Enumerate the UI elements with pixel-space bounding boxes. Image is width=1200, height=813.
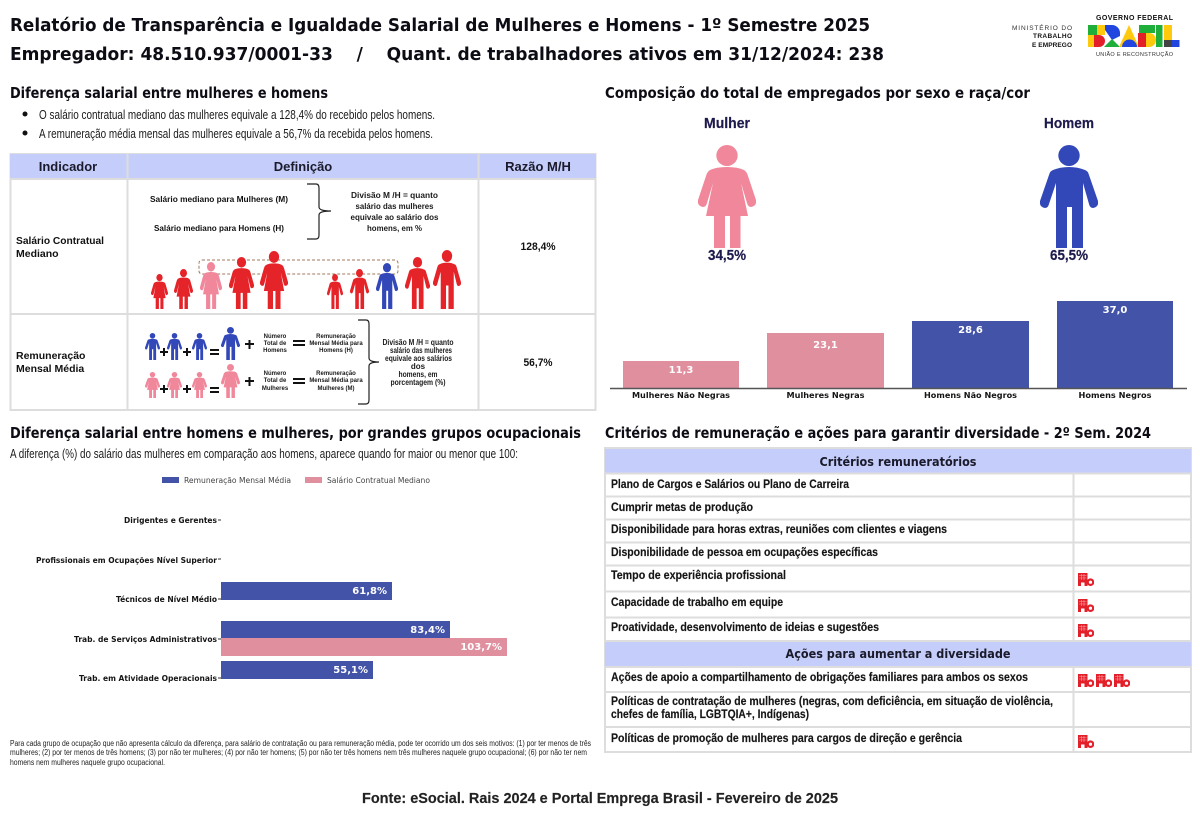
row: remuneração mensal média: Total de — [264, 378, 287, 384]
logo: governo federal brasil: GOVERNO FEDERAL — [1096, 15, 1174, 22]
header: critérios remuneratórios — [605, 449, 1191, 473]
action rows: Políticas de contratação de mulheres (negras, com deficiência, em situação de violência, — [611, 696, 1053, 708]
table header: Razão M/H — [505, 159, 571, 174]
pictogram: mulher: 34,5% — [708, 248, 746, 264]
header: ações para aumentar a diversidade: Ações para aumentar a diversidade — [786, 647, 1010, 661]
row: salário contratual mediano: salário das mulheres — [356, 202, 434, 211]
row: remuneração mensal média: Homens (H) — [319, 348, 353, 354]
row: salário contratual mediano: Salário mediano para Homens (H) — [154, 223, 284, 233]
footnote: mulheres; (2) por ter menos de três homens; (3) por não ter mulheres; (4) por não ter homens; (5) por não ter três homens nem três mulheres naquele grupo ocupacional; (6) por não ter nem — [10, 748, 587, 757]
bar chart: grupos ocupacionais: Trab. em Atividade Operacionais — [79, 674, 217, 683]
row: remuneração mensal média: Divisão M /H = quanto — [382, 338, 454, 347]
pictogram: homem: Homem — [1044, 116, 1094, 132]
table header: Indicador — [39, 159, 97, 174]
row: remuneração mensal média — [16, 320, 553, 404]
bar chart: sexo e raça/cor: 28,6 — [958, 325, 983, 336]
criteria rows: Proatividade, desenvolvimento de ideias e sugestões — [611, 622, 879, 634]
row: salário contratual mediano: equivale ao salário dos — [350, 213, 439, 222]
logo text: ministério — [1012, 23, 1072, 49]
bar chart: sexo e raça/cor: 23,1 — [813, 340, 838, 351]
row: remuneração mensal média: Remuneração — [16, 350, 85, 362]
criteria rows: Disponibilidade de pessoa em ocupações específicas — [611, 547, 878, 559]
row: remuneração mensal média: salário das mulheres — [390, 346, 452, 355]
bar chart: sexo e raça/cor: 37,0 — [1103, 305, 1127, 316]
action rows: Políticas de promoção de mulheres para cargos de direção e gerência — [611, 733, 963, 745]
bar chart: sexo e raça/cor: Homens Negros — [1078, 391, 1152, 400]
row: remuneração mensal média: Mensal Média — [16, 363, 84, 375]
bar chart: grupos ocupacionais: Profissionais em Ocupações Nível Superior — [36, 556, 217, 565]
bar chart: sexo e raça/cor: Mulheres Não Negras — [632, 391, 730, 400]
criteria rows: Tempo de experiência profissional — [611, 570, 786, 582]
row: salário contratual mediano: 128,4% — [520, 241, 556, 253]
row: remuneração mensal média: porcentagem (%) — [390, 378, 446, 387]
pictogram: homem: 65,5% — [1050, 248, 1088, 264]
row: remuneração mensal média: dos — [411, 362, 426, 371]
criteria rows: Plano de Cargos e Salários ou Plano de Carreira — [611, 479, 850, 491]
bullet list: A remuneração média mensal das mulheres equivale a 56,7% da recebida pelos homens. — [39, 127, 433, 141]
row: remuneração mensal média: Remuneração — [316, 334, 356, 340]
row: remuneração mensal média: Mulheres — [262, 386, 289, 392]
bar chart: grupos ocupacionais: 103,7% — [460, 642, 502, 653]
subtitle: grupos ocupacionais: A diferença (%) do salário das mulheres em comparação aos homens, aparece quando for maior ou menor que 100: — [10, 446, 518, 461]
row: salário contratual mediano — [16, 184, 556, 309]
row: remuneração mensal média: Remuneração — [316, 371, 356, 377]
header: critérios remuneratórios: Critérios remuneratórios — [820, 455, 976, 469]
pictogram: mulher — [698, 116, 756, 264]
title — [10, 15, 884, 65]
row: salário contratual mediano: Divisão M /H = quanto — [351, 191, 438, 200]
row: remuneração mensal média: Mensal Média para — [309, 341, 363, 347]
bar chart: sexo e raça/cor — [610, 301, 1187, 400]
row: remuneração mensal média: homens, em — [398, 370, 438, 379]
source: Fonte: eSocial. Rais 2024 e Portal Emprega Brasil - Fevereiro de 2025 — [362, 791, 838, 807]
pictogram: mulher: Mulher — [704, 116, 750, 132]
panel: critérios de remuneração e ações — [605, 448, 1191, 752]
heading: grupos ocupacionais: Diferença salarial entre homens e mulheres, por grandes grupos ocupacionais — [10, 424, 581, 442]
icons: empresas — [1078, 573, 1129, 748]
bar chart: grupos ocupacionais: 83,4% — [410, 625, 445, 636]
row: remuneração mensal média: Mensal Média para — [309, 378, 363, 384]
row: salário contratual mediano: Salário Contratual — [16, 235, 104, 247]
bar chart: grupos ocupacionais: Técnicos de Nível Médio — [116, 594, 217, 604]
action rows: chefes de família, LGBTQIA+, Indígenas) — [611, 709, 809, 721]
row: remuneração mensal média: Número — [264, 334, 287, 340]
row: remuneração mensal média: equivale aos salários — [385, 354, 452, 363]
footnote: Para cada grupo de ocupação que não apresenta cálculo da diferença, para salário de contratação ou para remuneração média, pode ter ocorrido um dos seis motivos: (1) por ter menos de três — [10, 739, 591, 748]
action rows — [611, 672, 1053, 745]
bullet list — [22, 108, 435, 141]
bar chart: grupos ocupacionais: 61,8% — [352, 586, 387, 597]
legend — [162, 475, 430, 485]
logo text: ministério: E EMPREGO — [1032, 42, 1072, 49]
bar chart: grupos ocupacionais: Trab. de Serviços Administrativos — [74, 635, 217, 644]
bar chart: sexo e raça/cor: 11,3 — [669, 365, 693, 376]
logo: governo federal brasil: UNIÃO E RECONSTRUÇÃO — [1096, 51, 1174, 58]
bullet list: O salário contratual mediano das mulheres equivale a 128,4% do recebido pelos homens. — [39, 108, 435, 122]
row: salário contratual mediano: Salário mediano para Mulheres (M) — [150, 194, 288, 204]
legend: Salário Contratual Mediano — [327, 476, 430, 485]
criteria rows — [611, 479, 947, 634]
legend: Remuneração Mensal Média — [184, 475, 291, 485]
logo: ministério e governo federal — [1012, 15, 1180, 58]
criteria rows: Capacidade de trabalho em equipe — [611, 597, 783, 609]
row: remuneração mensal média: Homens — [263, 348, 287, 354]
bar chart: grupos ocupacionais: Dirigentes e Gerentes — [124, 516, 217, 525]
row: remuneração mensal média: Número — [264, 371, 287, 377]
heading: composição: Composição do total de empregados por sexo e raça/cor — [605, 84, 1031, 102]
title: Relatório de Transparência e Igualdade Salarial de Mulheres e Homens - 1º Semestre 2025 — [10, 15, 870, 36]
criteria rows: Disponibilidade para horas extras, reuniões com clientes e viagens — [611, 524, 947, 536]
header: ações para aumentar a diversidade — [605, 641, 1191, 667]
logo: governo federal brasil — [1088, 15, 1180, 58]
row: salário contratual mediano: Mediano — [16, 248, 59, 260]
row: remuneração mensal média: 56,7% — [524, 357, 553, 369]
heading: diferença salarial: Diferença salarial entre mulheres e homens — [10, 84, 328, 102]
title: Empregador: 48.510.937/0001-33 / Quant. de trabalhadores ativos em 31/12/2024: 238 — [10, 44, 884, 65]
row: remuneração mensal média: Total de — [264, 341, 287, 347]
footnote — [10, 739, 591, 767]
table header: Definição — [274, 159, 332, 174]
bar chart: grupos ocupacionais — [36, 516, 507, 683]
row: salário contratual mediano: homens, em % — [367, 224, 422, 233]
bar chart: grupos ocupacionais: 55,1% — [333, 665, 368, 676]
logo text: ministério: TRABALHO — [1033, 33, 1072, 40]
pictogram: homem — [1040, 116, 1098, 264]
panel: tabela de indicadores — [10, 154, 596, 410]
criteria rows: Cumprir metas de produção — [611, 502, 753, 514]
bar chart: sexo e raça/cor: Mulheres Negras — [786, 391, 865, 400]
bar chart: sexo e raça/cor: Homens Não Negros — [924, 391, 1017, 400]
footnote: homens nem mulheres naquele grupo ocupacional. — [10, 758, 165, 767]
row: remuneração mensal média: Mulheres (M) — [317, 386, 355, 392]
logo text: ministério: MINISTÉRIO DO — [1012, 23, 1072, 32]
action rows: Ações de apoio a compartilhamento de obrigações familiares para ambos os sexos — [611, 672, 1028, 684]
table header — [10, 154, 596, 179]
